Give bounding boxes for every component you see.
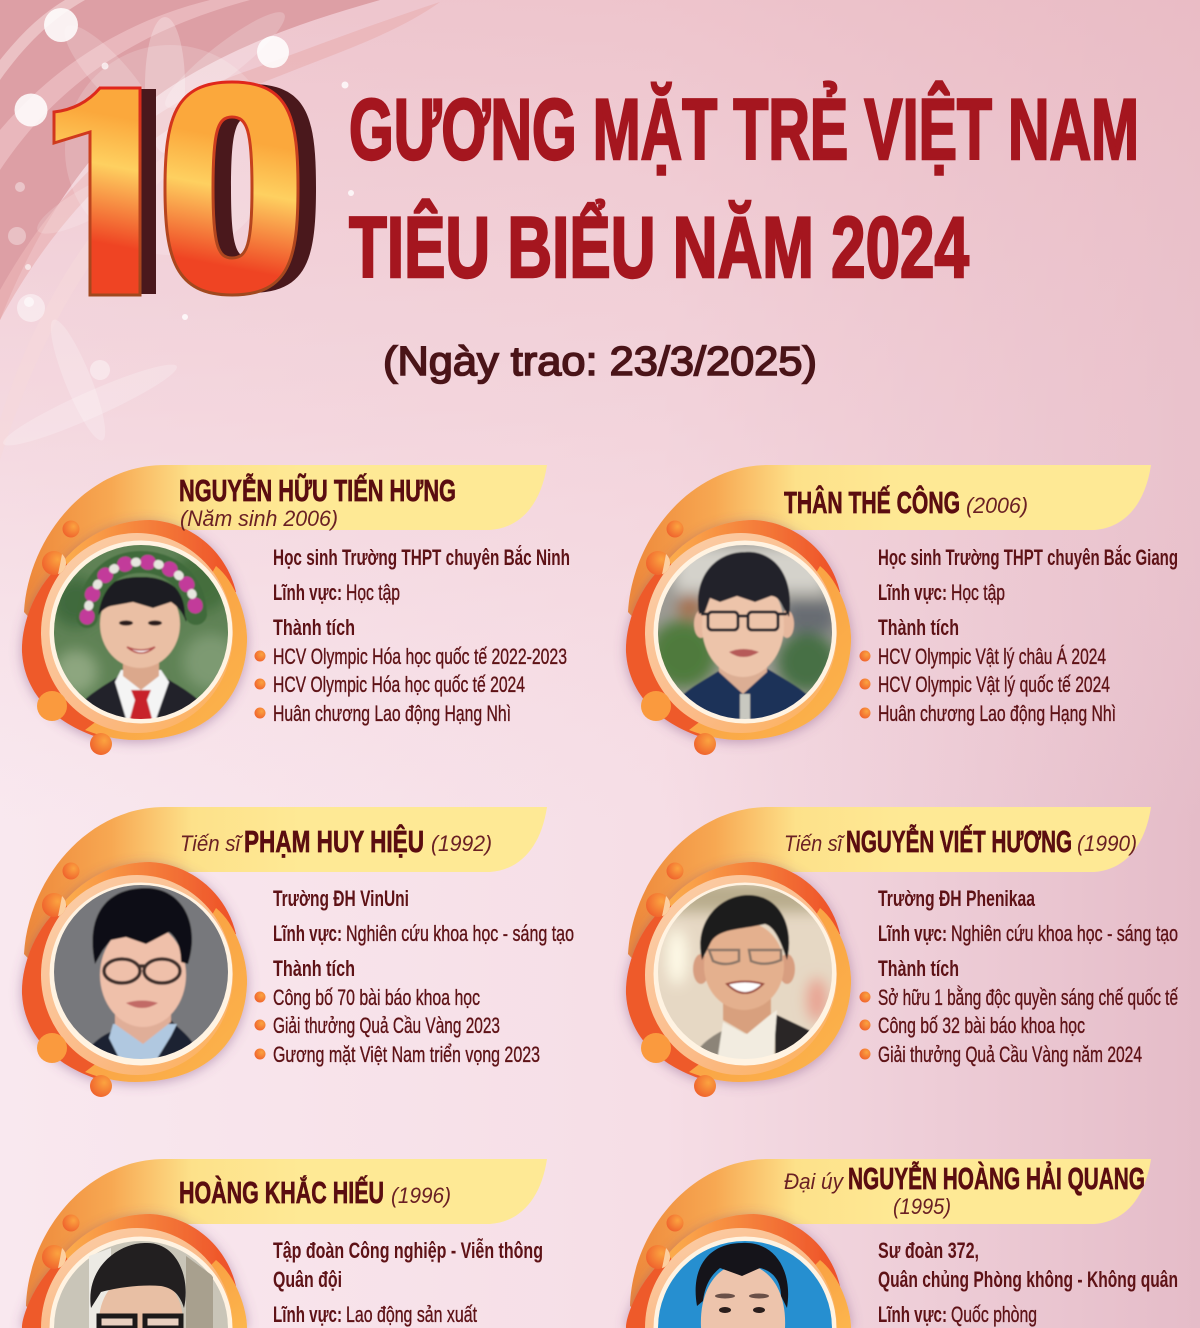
profile: Nguyễn Viết Hương — [626, 807, 1178, 1097]
details: Thành tích — [878, 615, 959, 640]
profile: Hoàng Khắc Hiếu: (1996) — [391, 1183, 451, 1208]
profile: Nguyễn Hữu Tiến Hưng: (Năm sinh 2006) — [180, 506, 338, 531]
details: HCV Olympic Vật lý châu Á 2024 — [878, 644, 1106, 669]
portrait — [655, 882, 835, 1062]
profile: Thân Thế Công — [626, 465, 1178, 755]
details: Quân đội — [273, 1267, 342, 1292]
details: Giải thưởng Quả Cầu Vàng 2023 — [273, 1013, 500, 1038]
details: Thành tích — [878, 956, 959, 981]
details: Trường ĐH Phenikaa — [878, 886, 1036, 911]
details: Thành tích — [273, 956, 355, 981]
details — [860, 545, 1178, 726]
details — [860, 886, 1178, 1067]
name banner text: HOÀNG KHẮC HIẾU — [179, 1174, 384, 1210]
profile: Phạm Huy Hiệu: (1992) — [431, 831, 492, 856]
profile: Nguyễn Viết Hương: NGUYỄN VIẾT HƯƠNG — [846, 824, 1072, 859]
details: Lĩnh vực: — [878, 921, 947, 946]
details: HCV Olympic Hóa học quốc tế 2024 — [273, 672, 525, 697]
decorative bubbles — [8, 8, 354, 380]
details: Học tập — [951, 580, 1005, 605]
name banner text: NGUYỄN HỮU TIẾN HƯNG — [179, 472, 456, 508]
portrait — [658, 1241, 832, 1328]
profile: Nguyễn Hữu Tiến Hưng — [22, 465, 570, 755]
details — [254, 886, 574, 1067]
name banner text: Tiến sĩ — [180, 831, 244, 856]
details: Lao động sản xuất — [346, 1302, 477, 1327]
details: Công bố 32 bài báo khoa học — [878, 1013, 1085, 1038]
portrait — [54, 545, 228, 719]
details: Sư đoàn 372, — [878, 1238, 979, 1263]
name banner text: Đại úy — [784, 1169, 845, 1194]
big number 10: 0 — [172, 21, 314, 354]
profile: Thân Thế Công: (2006) — [966, 493, 1028, 518]
award date: (Ngày trao: 23/3/2025) — [383, 338, 817, 384]
portrait — [658, 545, 832, 719]
details — [273, 1238, 543, 1327]
details: Quốc phòng — [951, 1302, 1037, 1327]
details: HCV Olympic Vật lý quốc tế 2024 — [878, 672, 1110, 697]
details: Nghiên cứu khoa học - sáng tạo — [346, 921, 574, 946]
portrait — [51, 882, 231, 1062]
big number 10 — [52, 80, 316, 296]
details: Thành tích — [273, 615, 355, 640]
details: Huân chương Lao động Hạng Nhì — [273, 701, 511, 726]
details: Tập đoàn Công nghiệp - Viễn thông — [273, 1238, 543, 1263]
details: Học sinh Trường THPT chuyên Bắc Ninh — [273, 545, 570, 570]
profile: Nguyễn Hoàng Hải Quang: (1995) — [893, 1194, 951, 1219]
details: Công bố 70 bài báo khoa học — [273, 985, 480, 1010]
details: Học tập — [346, 580, 400, 605]
profile: Nguyễn Viết Hương: (1990) — [1077, 831, 1137, 856]
big number 10: 1 — [52, 22, 146, 355]
details: Gương mặt Việt Nam triển vọng 2023 — [273, 1042, 540, 1067]
profile: Hoàng Khắc Hiếu — [22, 1159, 547, 1328]
profile: Phạm Huy Hiệu — [22, 807, 574, 1097]
details: Lĩnh vực: — [878, 1302, 947, 1327]
portrait — [54, 1241, 228, 1328]
big number 10: 1 — [102, 22, 196, 355]
details: Lĩnh vực: — [273, 580, 342, 605]
details — [878, 1238, 1178, 1327]
profile: Phạm Huy Hiệu: PHẠM HUY HIỆU — [244, 823, 424, 859]
details: Lĩnh vực: — [878, 580, 947, 605]
details: Trường ĐH VinUni — [273, 886, 409, 911]
name banner text: Tiến sĩ — [784, 831, 846, 856]
details: Lĩnh vực: — [273, 921, 342, 946]
title: TIÊU BIỂU NĂM 2024 — [349, 200, 969, 296]
name banner text: THÂN THẾ CÔNG — [784, 484, 960, 520]
details: Lĩnh vực: — [273, 1302, 342, 1327]
title — [349, 82, 1139, 296]
profile: Nguyễn Hoàng Hải Quang — [626, 1159, 1178, 1328]
details: HCV Olympic Hóa học quốc tế 2022-2023 — [273, 644, 567, 669]
details — [254, 545, 570, 726]
big number 10: 0 — [160, 21, 302, 354]
